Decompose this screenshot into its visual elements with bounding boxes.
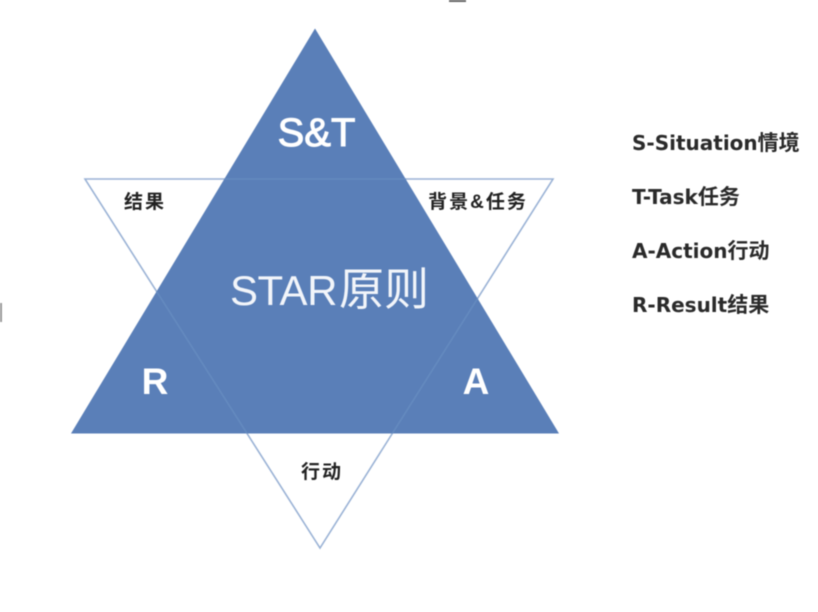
- label: STAR principle: 原则: [339, 264, 429, 315]
- label: STAR principle: STAR: [230, 267, 337, 314]
- label: action: 行动: [301, 461, 343, 483]
- legend: task: T-Task任务: [632, 185, 740, 209]
- legend: [632, 131, 800, 317]
- inverted triangle overlap line inside blue: [158, 292, 477, 432]
- label: R: R: [142, 361, 168, 402]
- label: A: A: [463, 361, 489, 402]
- upright blue triangle: [71, 28, 559, 434]
- inverted outlined triangle: [85, 179, 553, 548]
- legend: situation: S-Situation情境: [632, 131, 800, 155]
- label: S&T: S&T: [278, 111, 355, 155]
- label: background and task: 背景&任务: [428, 191, 528, 213]
- legend: result: R-Result结果: [632, 293, 769, 317]
- artifact marks at page edges: [0, 0, 466, 322]
- label: result: 结果: [124, 191, 166, 213]
- legend: action: A-Action行动: [632, 239, 770, 263]
